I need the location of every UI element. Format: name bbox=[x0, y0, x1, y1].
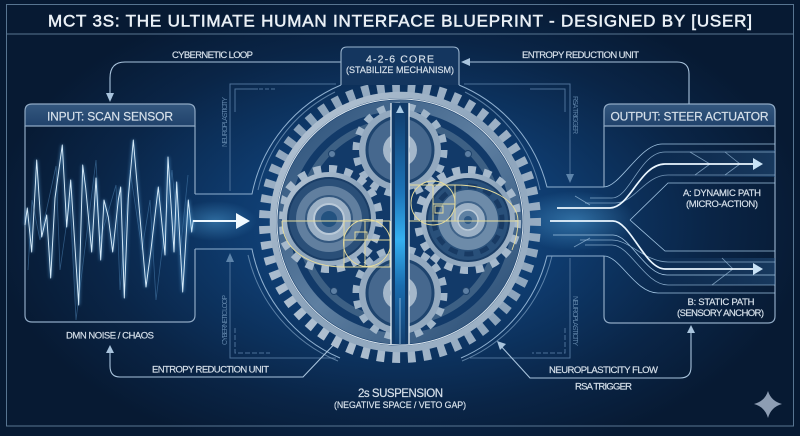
golden ratio overlay: right bbox=[408, 181, 518, 250]
title bar: MCT 3S: THE ULTIMATE HUMAN INTERFACE BLUEPRINT - DESIGNED BY [USER] bbox=[48, 12, 752, 30]
label: entropy reduction top: ENTROPY REDUCTION UNIT bbox=[522, 50, 639, 61]
outer silver ring bbox=[273, 95, 527, 349]
blueprint corner: bottom right bbox=[470, 258, 578, 358]
gear teeth ring bbox=[257, 79, 543, 365]
arrow: static path bbox=[753, 263, 763, 275]
panel: 4-2-6 core bbox=[341, 47, 459, 85]
panel header: output bbox=[604, 104, 775, 126]
arrow: entropy reduction bottom bbox=[106, 336, 342, 377]
gear: top bbox=[356, 106, 444, 194]
blueprint corner: bottom left with arrow bbox=[222, 253, 336, 358]
label: neuroplasticity flow: NEUROPLASTICITY FLOW bbox=[549, 365, 658, 376]
blueprint corner: top right with arrow: RSA TRIGGER bbox=[571, 96, 578, 134]
arrow: entropy reduction top bbox=[461, 58, 689, 104]
label: 2s suspension bbox=[334, 388, 466, 410]
gear: left bbox=[279, 169, 379, 269]
label: static path: (SENSORY ANCHOR) bbox=[677, 308, 764, 319]
panel: 4-2-6 core: 4-2-6 CORE bbox=[366, 54, 434, 66]
label: dynamic path: (MICRO-ACTION) bbox=[686, 199, 758, 210]
arrow: cybernetic loop bbox=[106, 62, 341, 102]
panel header: input bbox=[25, 104, 195, 126]
gear: right bbox=[418, 170, 518, 270]
arrow: input to core bbox=[173, 201, 257, 241]
blueprint corner: bottom left with arrow: CYBERNETIC LOOP bbox=[222, 295, 229, 345]
panel: 4-2-6 core: (STABILIZE MECHANISM) bbox=[346, 65, 454, 75]
label: dynamic path bbox=[683, 188, 761, 210]
label: static path: B: STATIC PATH bbox=[688, 297, 755, 308]
label: DMN noise: DMN NOISE / CHAOS bbox=[66, 330, 154, 342]
blueprint corner: top left: NEUROPLASTICITY bbox=[222, 97, 229, 147]
panel: output steer actuator bbox=[604, 104, 775, 323]
main gear bbox=[257, 79, 543, 365]
heading: output: OUTPUT: STEER ACTUATOR bbox=[610, 110, 769, 124]
label: dynamic path: A: DYNAMIC PATH bbox=[683, 188, 761, 199]
arrow: neuroplasticity flow bbox=[497, 325, 695, 378]
blueprint corner: bottom right: NEUROPLASTICITY bbox=[571, 296, 578, 346]
panel border: input bbox=[25, 126, 195, 322]
label: entropy reduction bottom: ENTROPY REDUCTION UNIT bbox=[152, 364, 269, 376]
panel border: output bbox=[604, 126, 775, 323]
blueprint corner: top left bbox=[222, 84, 336, 191]
central suspension column bbox=[391, 103, 409, 344]
output path network bbox=[513, 144, 775, 293]
label: 2s suspension: 2s SUSPENSION bbox=[358, 388, 443, 400]
label: RSA trigger: RSA TRIGGER bbox=[575, 382, 632, 392]
blueprint corner: top right with arrow bbox=[464, 84, 578, 183]
arrow: dynamic path bbox=[753, 158, 763, 170]
label: static path bbox=[677, 297, 764, 319]
inner gears bbox=[279, 106, 518, 337]
golden ratio overlay: left bbox=[282, 220, 390, 267]
label: 2s suspension: (NEGATIVE SPACE / VETO GAP) bbox=[334, 400, 466, 410]
housing arcs around main gear bbox=[195, 85, 604, 361]
icon: sparkle star bbox=[754, 391, 782, 418]
label: cybernetic loop: CYBERNETIC LOOP bbox=[172, 50, 253, 61]
panel: input scan sensor bbox=[25, 104, 195, 322]
chart: DMN noise waveform bbox=[25, 140, 193, 320]
gear: bottom bbox=[356, 249, 444, 337]
bolts bbox=[328, 150, 472, 294]
heading: input: INPUT: SCAN SENSOR bbox=[47, 110, 173, 124]
